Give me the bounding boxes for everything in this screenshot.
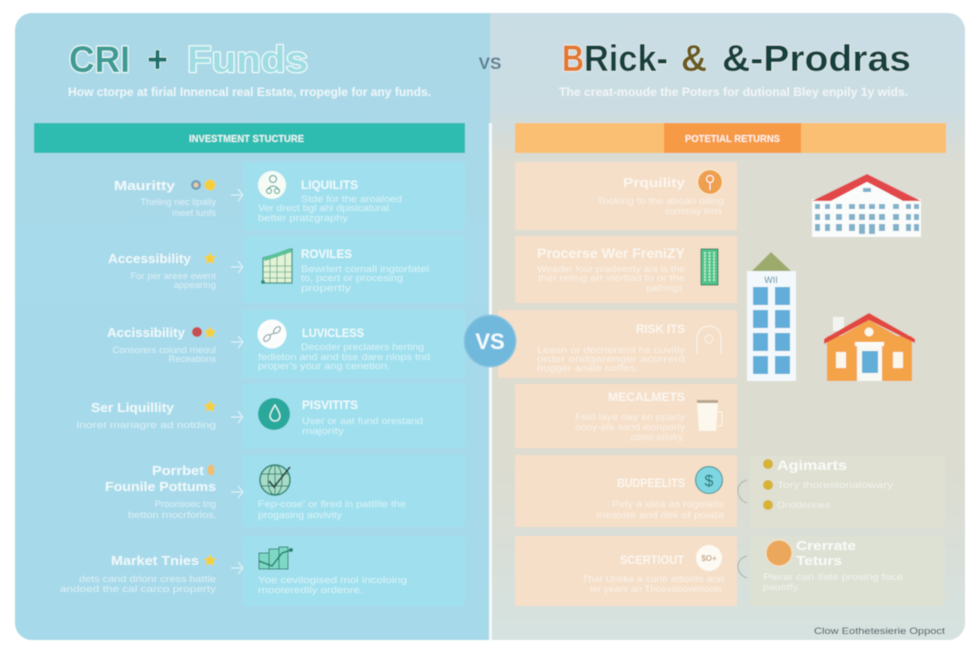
card: liquilits [243,162,465,230]
row 1 left: maturity: meet lunfs [172,208,216,219]
row 6 left: market trends: andoed the cal carco property [60,584,216,595]
row 5 left: portfolio returns: betton rnocrforios. [128,510,217,521]
card: mecalmets: como oriofry. [631,432,685,443]
row 1 left: maturity: Theling nec lipally [140,197,216,208]
card: globe [243,455,465,527]
illustration: tower: WII [764,275,778,285]
card: pisvitits: PISVITITS [302,398,358,412]
versus badge [464,314,516,368]
left title [69,39,308,80]
side card: crerrate: Teturs [796,553,842,568]
card: scertiout: ler years an Thoevatioverionis [590,584,722,595]
row 6 left: market trends [60,553,243,595]
card: pisvitits: User or aat fund orestand [302,416,423,427]
card: luvicless: Decoder preclaters herting [301,342,424,353]
card: risk its: order ondgarenger acorrerd [537,354,685,365]
card: mecalmets: MECALMETS [608,390,685,404]
card: roviles: Bewrlert comall ingtorfatel [301,264,429,275]
card: liquilits: LIQUILITS [301,178,358,192]
row 2 left: accessibility: For per areee ewent [130,271,216,282]
card: risk its [498,310,737,378]
side card: agimarts: Ondderines [777,500,830,511]
versus label top: VS [479,54,501,73]
row 4 left: liquidity: Ser Liquillity [91,400,175,415]
row 3 left: accissibility: Consorers coiund rneoul [112,345,216,356]
illustration: house [824,313,915,381]
card: chart [243,536,465,606]
side card: agimarts: Agimarts [777,457,847,473]
row 5 left: portfolio returns: Porrbet [152,463,205,478]
row 5 left: portfolio returns: Proorisoec tng [155,499,216,510]
left title: CRI [69,39,130,80]
card: budpeelits: $ [705,473,714,490]
left title: + [147,39,168,80]
card: liquilits: better pratzgraphy [258,213,348,224]
card: procerse: Weader four pradeesty ant is the [537,264,685,275]
card: procerse [515,236,737,303]
card: liquilits: Ver drect bgl ahi dpisicatural [258,203,389,214]
card: budpeelits: BUDPEELITS [617,476,685,490]
row 4 left: liquidity: Inoret mariagre ad notding [76,420,216,431]
side card: agimarts: Tory thorestorialowary [777,480,893,491]
card: procerse: thet reting art vierfiad to or the [538,273,685,284]
card: pisvitits: majority [302,426,344,437]
row 1 left: maturity [114,178,243,219]
card: luvicless [243,310,465,378]
right title: &-Prodras [722,38,911,79]
card: chart: Yoe cevilogised mol incoloing [258,575,407,586]
side card: crerrate [750,536,945,606]
connector arcs [738,480,747,578]
header: investment structure: INVESTMENT STUCTURE [189,134,304,145]
row 2 left: accessibility [108,251,243,291]
card: procerse: Procerse Wer FreniZY [537,245,686,261]
card: luvicless: proper's your ang cenetion. [258,361,390,372]
row 2 left: accessibility: appearing [174,280,216,291]
card: mecalmets [515,384,737,448]
panel: right background [490,13,965,640]
row 5 left: portfolio returns [105,463,243,521]
card: luvicless: LUVICLESS [302,326,364,340]
row 1 left: maturity: Mauritty [114,178,176,193]
side card: crerrate: Plerar can ifate prosing foce [763,572,903,583]
versus badge: VS [475,329,505,354]
header: potential returns [515,123,946,153]
card: pisvitits [243,384,465,448]
side card: crerrate: Crerrate [796,538,856,553]
panel: left background [15,13,490,640]
row 4 left: liquidity [76,400,243,431]
row 3 left: accissibility: Accissibility [107,325,186,340]
header: potential returns: POTETIAL RETURNS [685,134,780,145]
card: prquility: curnmay lorts [665,206,722,217]
card: scertiout: $O+ [701,554,717,563]
card: prquility: Tooking to the aboari oiling [597,196,724,207]
illustration: tower [747,252,796,381]
card: liquilits: Stde for the aroaloed [301,194,402,205]
right title [562,38,911,79]
card: risk its: Leasn or decnerient he cuvitly [537,345,685,356]
right subtitle: The creat-moude the Poters for dutional Bley enpily 1y wids. [559,87,908,99]
card: globe: progasing aovivity [258,510,342,521]
header: investment structure [34,123,465,153]
footer note: Clow Eothetesierie Oppoct [814,626,945,637]
right title: & [681,38,707,79]
row 6 left: market trends: Market Tnies [111,553,199,568]
card: chart: rnooteredlly ordenre. [258,585,363,596]
card: risk its: RISK ITS [636,322,685,336]
card: roviles: ROVILES [301,247,352,261]
left subtitle: How ctorpe at firial Innencal real Estate, rropegle for any funds. [68,87,431,99]
card: prquility: Prquility [623,175,686,190]
card: luvicless: fedleton and and tise dare nlops tnd [258,352,430,363]
side card: crerrate: pauotfy. [763,582,800,593]
row 2 left: accessibility: Accessibility [108,251,192,266]
card: prquility [515,162,737,230]
right title: B [562,38,584,79]
card: risk its: bugger anale ooffes. [537,363,638,374]
left title: Funds [187,39,308,80]
right title: Rick- [584,38,668,79]
card: mecalmets: Feld laye day en pparly [575,412,685,423]
card: budpeelits: Pely a idea as rogolatis [612,499,724,510]
row 6 left: market trends: dets cand drlonr cress battle [79,574,216,585]
card: roviles [243,236,465,303]
card: scertiout: SCERTIOUT [620,553,685,567]
card: roviles: propertly [301,283,351,294]
card: scertiout [515,536,737,606]
row 3 left: accissibility [107,325,243,365]
card: budpeelits: Ineatote and dek of poiata [596,510,725,521]
card: scertiout: That Unlike a curle attionts and [582,574,724,585]
illustration: large institutional building [812,174,921,237]
card: mecalmets: oooy-afe aand ioonporty [575,422,685,433]
row 5 left: portfolio returns: Founile Pottums [105,479,216,494]
card: procerse: pathings. [646,283,685,294]
card: globe: Fep-cose' or fired in pattlite the [258,499,406,510]
side card: agimarts [750,455,945,527]
row 3 left: accissibility: Receations [168,354,216,365]
card: roviles: to, pcert or procesing [301,273,403,284]
card: budpeelits [515,455,737,527]
